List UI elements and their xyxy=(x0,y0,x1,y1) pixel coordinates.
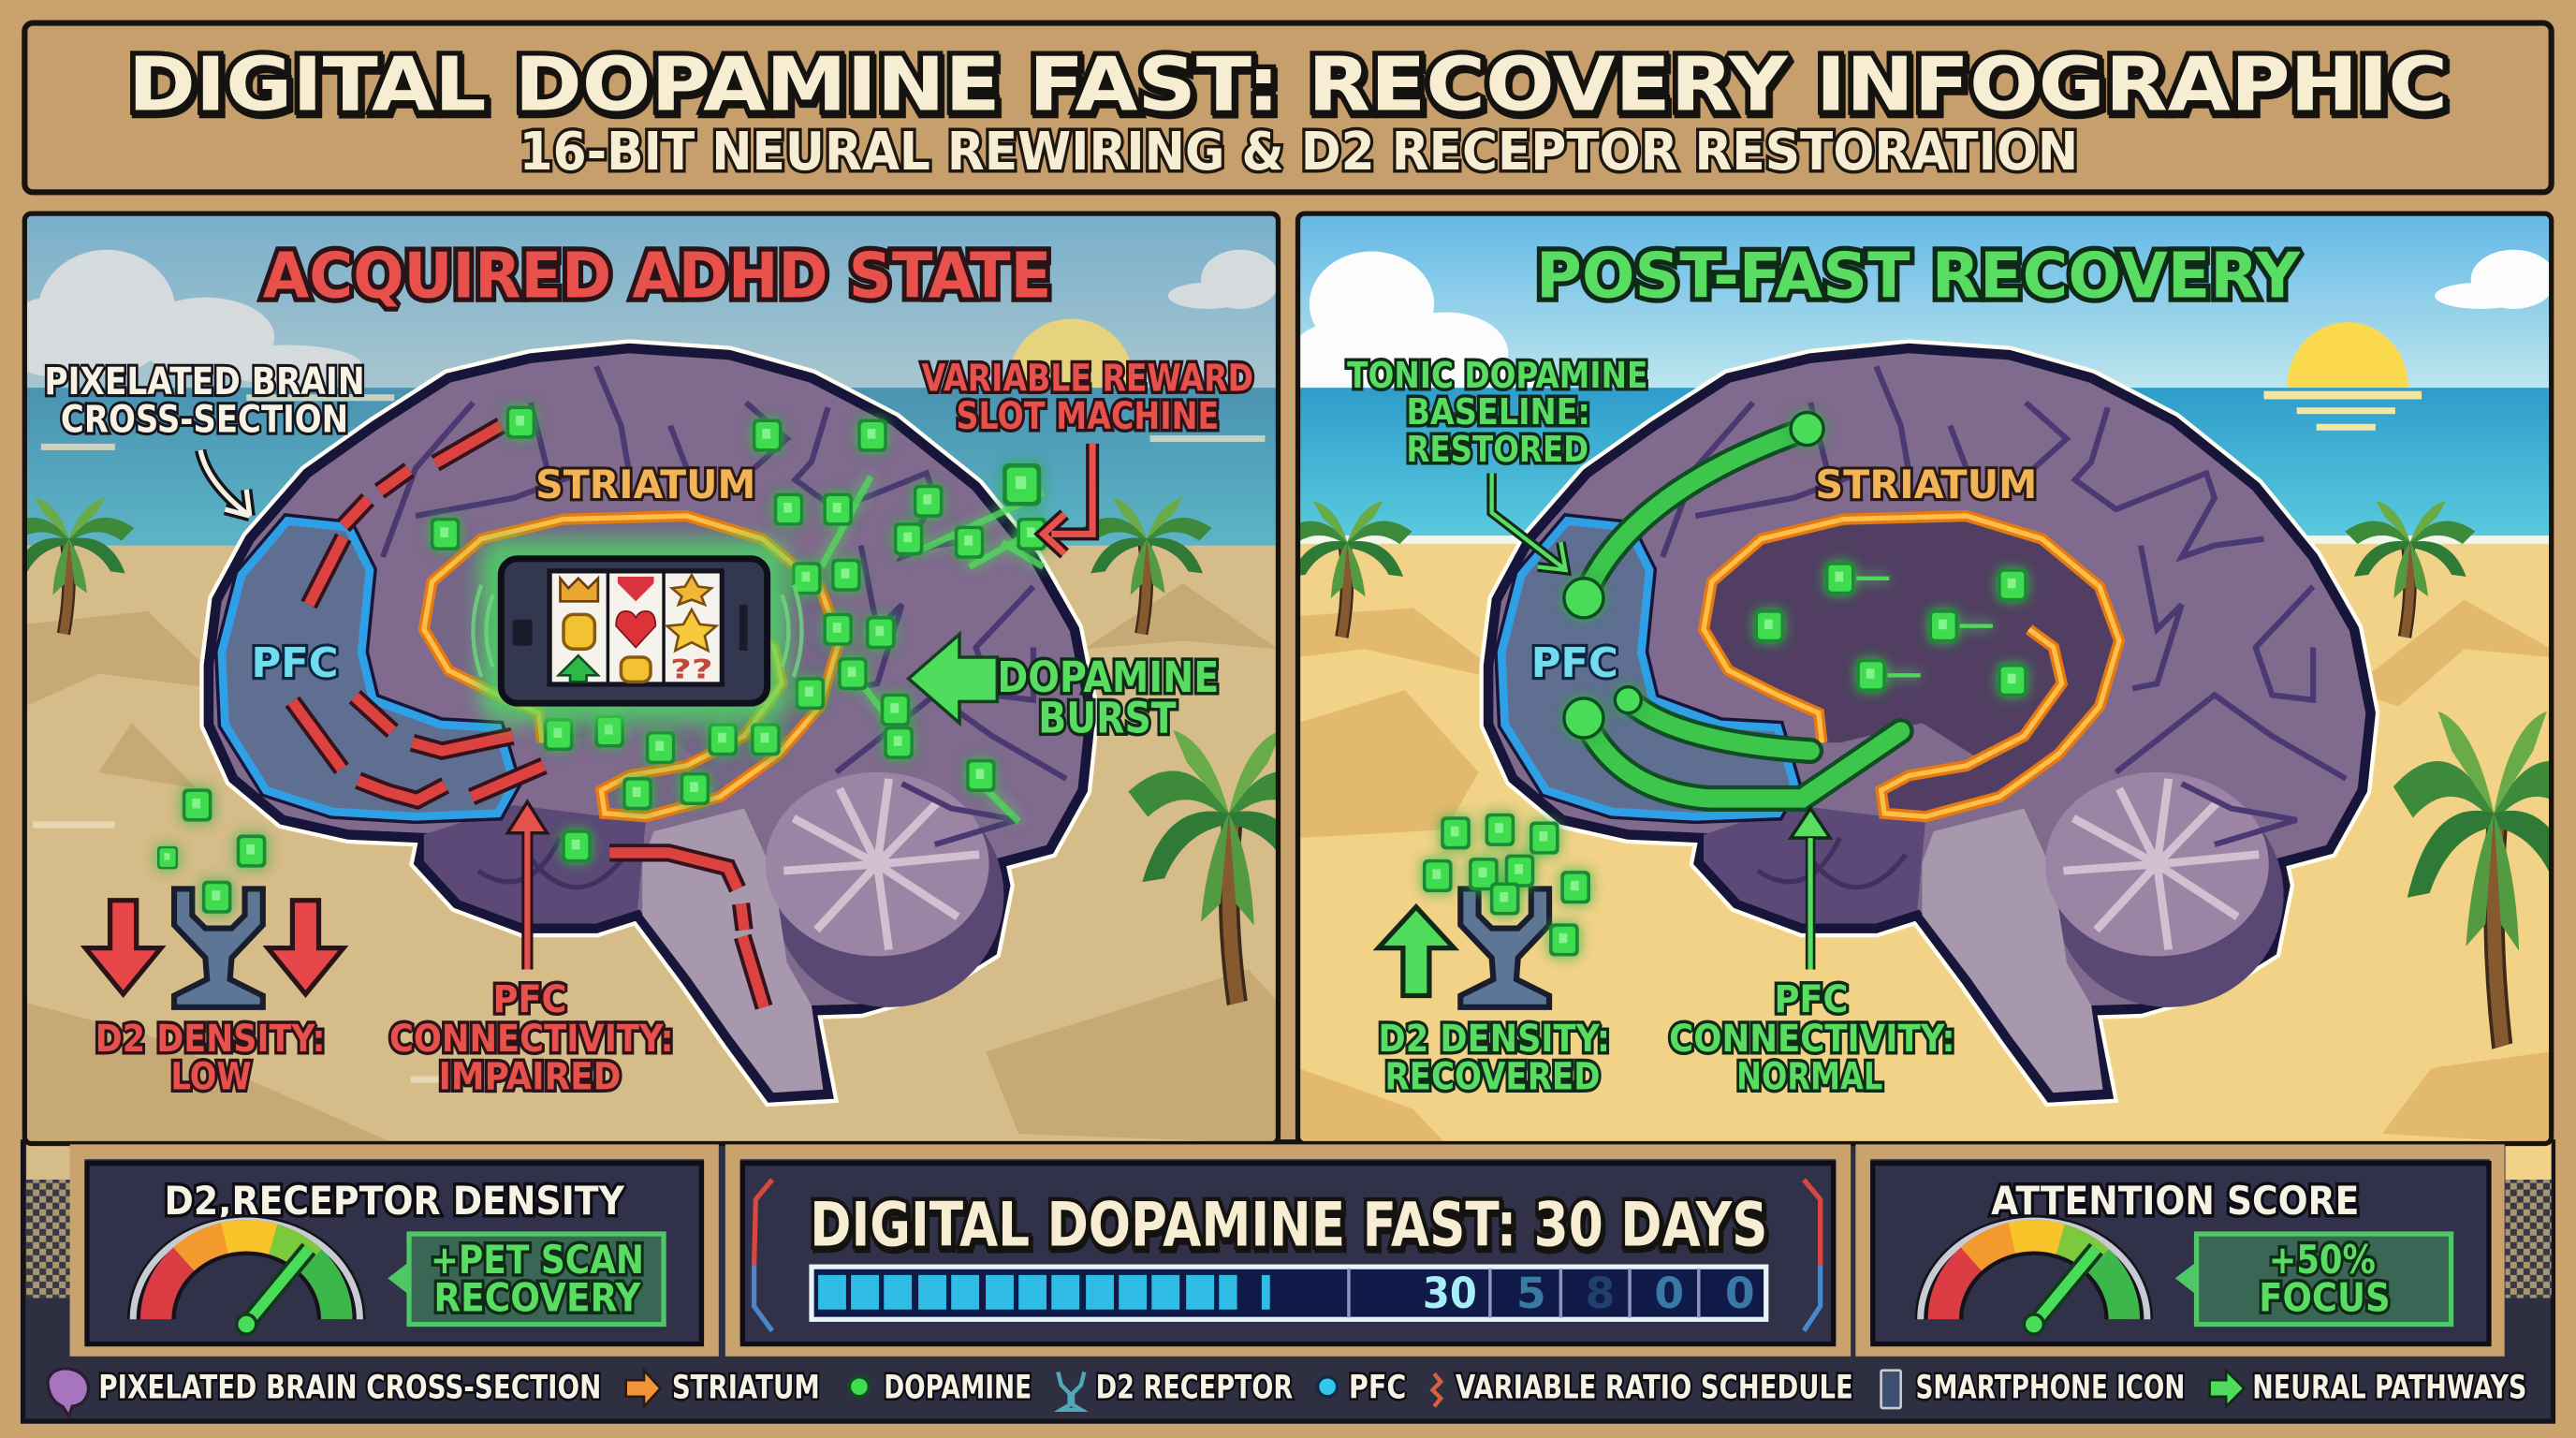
callout: +50% focus: FOCUS xyxy=(2259,1275,2391,1321)
icon: coin xyxy=(564,614,594,649)
bar numbers: 30 xyxy=(1423,1269,1477,1318)
icon: PFC xyxy=(1318,1377,1338,1397)
subtitle: 16-BIT NEURAL REWIRING & D2 RECEPTOR RESTORATION xyxy=(520,122,2078,183)
legend: PIXELATED BRAIN CROSS-SECTION xyxy=(98,1369,601,1407)
panel: post-fast recovery xyxy=(1282,213,2576,1143)
bar numbers: 8 xyxy=(1586,1269,1615,1318)
label: D2 density low xyxy=(95,1017,326,1099)
arrow: white to brain xyxy=(200,450,250,516)
callout: PET scan recovery: +PET SCAN xyxy=(431,1237,644,1283)
heading: ATTENTION SCORE xyxy=(1991,1178,2359,1224)
icon: dopamine xyxy=(849,1377,869,1397)
panel heading: post-fast recovery: POST-FAST RECOVERY xyxy=(1536,240,2301,313)
heading: D2,RECEPTOR DENSITY xyxy=(165,1178,624,1224)
label: striatum: STRIATUM xyxy=(1815,462,2037,507)
receptor with low D2 density xyxy=(85,788,344,1007)
label: pixelated brain cross-section xyxy=(44,360,365,442)
legend: VARIABLE RATIO SCHEDULE xyxy=(1456,1369,1853,1407)
legend: PFC xyxy=(1349,1369,1406,1407)
bottom dashboard background xyxy=(23,1142,2553,1421)
impaired neural pathways in red xyxy=(292,426,764,1007)
bar numbers: 0 xyxy=(1654,1269,1684,1318)
left striatum with orange outline xyxy=(424,516,840,816)
bar numbers xyxy=(1423,1269,1755,1318)
icon: green arrow xyxy=(2210,1371,2244,1406)
label: variable reward slot machine: SLOT MACHINE xyxy=(956,394,1219,438)
icon: heart middle xyxy=(616,611,655,647)
heading: DIGITAL DOPAMINE FAST: 30 DAYS xyxy=(810,1190,1767,1260)
callout: +50% focus xyxy=(2175,1234,2452,1325)
arrow: density down right xyxy=(268,901,344,994)
legend: STRIATUM xyxy=(672,1369,820,1407)
bar numbers: 0 xyxy=(1725,1269,1755,1318)
label: dopamine burst: BURST xyxy=(1038,694,1177,743)
legend: DOPAMINE xyxy=(884,1369,1032,1407)
label: PFC connectivity normal: NORMAL xyxy=(1736,1055,1882,1099)
label: dopamine burst: DOPAMINE xyxy=(997,653,1219,702)
label: D2 density recovered: RECOVERED xyxy=(1385,1055,1600,1099)
title: DIGITAL DOPAMINE FAST: RECOVERY INFOGRAPHIC xyxy=(128,42,2448,128)
bar numbers: 5 xyxy=(1516,1269,1546,1318)
label: PFC connectivity impaired xyxy=(389,977,674,1099)
icon: star top xyxy=(672,575,711,605)
panel heading: acquired ADHD state: ACQUIRED ADHD STATE xyxy=(263,240,1051,313)
label: PFC connectivity impaired: IMPAIRED xyxy=(439,1055,621,1099)
question marks: ?? xyxy=(670,654,713,685)
label: striatum: STRIATUM xyxy=(535,462,755,507)
label: PFC connectivity impaired: PFC xyxy=(493,977,567,1021)
panel: D2 receptor density xyxy=(77,1152,711,1349)
arrow: red to slot machine xyxy=(1043,444,1092,553)
progress bar xyxy=(812,1267,1766,1319)
arrow: PFC connectivity xyxy=(507,801,547,969)
icon: green spade xyxy=(559,655,598,682)
dopamine burst particles xyxy=(431,405,1046,862)
legend: D2 RECEPTOR xyxy=(1096,1369,1293,1407)
icon: brain xyxy=(48,1369,89,1416)
label: PFC: PFC xyxy=(1531,639,1618,687)
label: tonic dopamine baseline restored: TONIC DOPAMINE xyxy=(1347,355,1647,397)
header banner xyxy=(24,23,2552,192)
arrow: density down left xyxy=(85,901,161,994)
left bracket xyxy=(754,1180,772,1331)
legend xyxy=(48,1369,2526,1416)
label: dopamine burst xyxy=(997,653,1219,743)
label: PFC connectivity normal xyxy=(1669,977,1955,1099)
label: variable reward slot machine: VARIABLE REWARD xyxy=(922,357,1253,401)
receptor with recovered D2 density xyxy=(1379,814,1590,1007)
panel: acquired ADHD state xyxy=(4,213,1329,1143)
label: tonic dopamine baseline restored xyxy=(1347,355,1647,471)
panel: attention score xyxy=(1863,1152,2497,1349)
arrow: white to brain fill xyxy=(200,450,250,516)
label: tonic dopamine baseline restored: BASELINE: xyxy=(1406,391,1590,433)
right bracket xyxy=(1804,1180,1821,1331)
icon: orange arrow xyxy=(626,1371,661,1406)
icon: star middle xyxy=(667,609,716,651)
label: tonic dopamine baseline restored: RESTORED xyxy=(1406,429,1588,471)
gauge xyxy=(1921,1221,2147,1334)
label: D2 density recovered: D2 DENSITY: xyxy=(1379,1017,1610,1061)
label: D2 density low: LOW xyxy=(171,1055,252,1099)
restored neural pathways xyxy=(1564,413,1901,799)
icon: smartphone xyxy=(1881,1371,1901,1408)
left beach background xyxy=(4,213,1329,1143)
label: pixelated brain cross-section: PIXELATED BRAIN xyxy=(44,360,365,404)
panel: 30 day fast progress xyxy=(733,1152,1843,1349)
legend: SMARTPHONE ICON xyxy=(1915,1369,2185,1407)
icon: coin bottom xyxy=(621,657,651,682)
right brain cross-section xyxy=(1488,348,2371,1097)
label: PFC: PFC xyxy=(252,639,339,687)
label: D2 density recovered xyxy=(1379,1017,1610,1099)
icon: crown xyxy=(560,579,598,601)
right striatum with orange outline xyxy=(1704,516,2119,816)
tonic dopamine particles xyxy=(1754,562,2027,697)
label: variable reward slot machine xyxy=(922,357,1253,438)
icon: receptor xyxy=(1058,1372,1084,1410)
label: PFC connectivity normal: PFC xyxy=(1775,977,1848,1021)
arrow: to tonic baseline xyxy=(1492,473,1566,570)
arrow: density up xyxy=(1379,907,1454,996)
icon: heart top xyxy=(618,577,654,601)
callout: +50% focus: +50% xyxy=(2269,1237,2376,1283)
label: pixelated brain cross-section: CROSS-SECTION xyxy=(61,398,348,442)
right beach background xyxy=(1282,213,2576,1143)
arrow: dopamine burst xyxy=(909,634,997,723)
callout: PET scan recovery xyxy=(388,1234,664,1325)
arrow: PFC connectivity normal xyxy=(1791,808,1830,969)
label: PFC connectivity impaired: CONNECTIVITY: xyxy=(389,1017,674,1061)
label: D2 density low: D2 DENSITY: xyxy=(95,1017,326,1061)
left brain cross-section xyxy=(209,348,1090,1097)
label: PFC connectivity normal: CONNECTIVITY: xyxy=(1669,1017,1955,1061)
icon: variable ratio xyxy=(1432,1373,1441,1406)
gauge xyxy=(133,1221,359,1334)
slot machine smartphone xyxy=(473,539,801,723)
callout: PET scan recovery: RECOVERY xyxy=(433,1275,641,1321)
